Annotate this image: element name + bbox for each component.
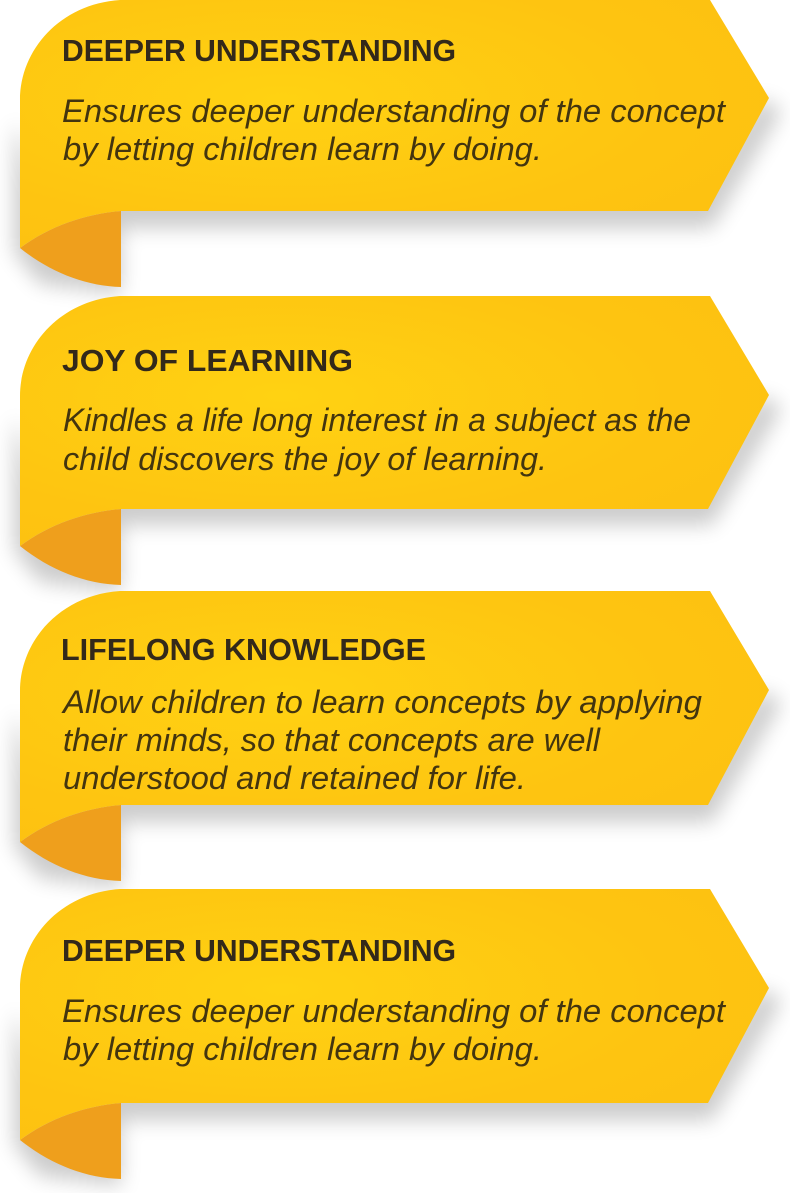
banner 4 — [14, 889, 782, 1186]
fold 1 — [20, 211, 121, 287]
body 3: their minds, so that concepts are well — [63, 722, 601, 758]
body 4: Ensures deeper understanding of the concept — [62, 993, 726, 1029]
body 4: by letting children learn by doing. — [63, 1031, 542, 1067]
fold 4 — [20, 1103, 121, 1179]
ribbon 2 — [20, 296, 769, 546]
body 1: by letting children learn by doing. — [63, 131, 542, 167]
ribbon 4 — [20, 889, 769, 1140]
body 2: child discovers the joy of learning. — [63, 441, 547, 477]
body 3 — [61, 684, 702, 796]
banner 3 — [14, 591, 782, 888]
body 1: Ensures deeper understanding of the concept — [62, 93, 726, 129]
banner 1 — [14, 0, 782, 294]
body 3: Allow children to learn concepts by applying — [61, 684, 702, 720]
heading 1: DEEPER UNDERSTANDING — [62, 33, 456, 68]
body 2: Kindles a life long interest in a subject as the — [63, 402, 691, 438]
body 1 — [62, 93, 726, 167]
body 3: understood and retained for life. — [63, 760, 526, 796]
banner 2 — [14, 296, 782, 592]
heading 3: LIFELONG KNOWLEDGE — [61, 632, 426, 667]
heading 2: JOY OF LEARNING — [62, 343, 353, 378]
ribbon 1 — [20, 0, 769, 248]
fold 3 — [20, 805, 121, 881]
body 2 — [63, 402, 691, 477]
body 4 — [62, 993, 726, 1067]
heading 4: DEEPER UNDERSTANDING — [62, 933, 456, 968]
ribbon 3 — [20, 591, 769, 842]
fold 2 — [20, 509, 121, 585]
